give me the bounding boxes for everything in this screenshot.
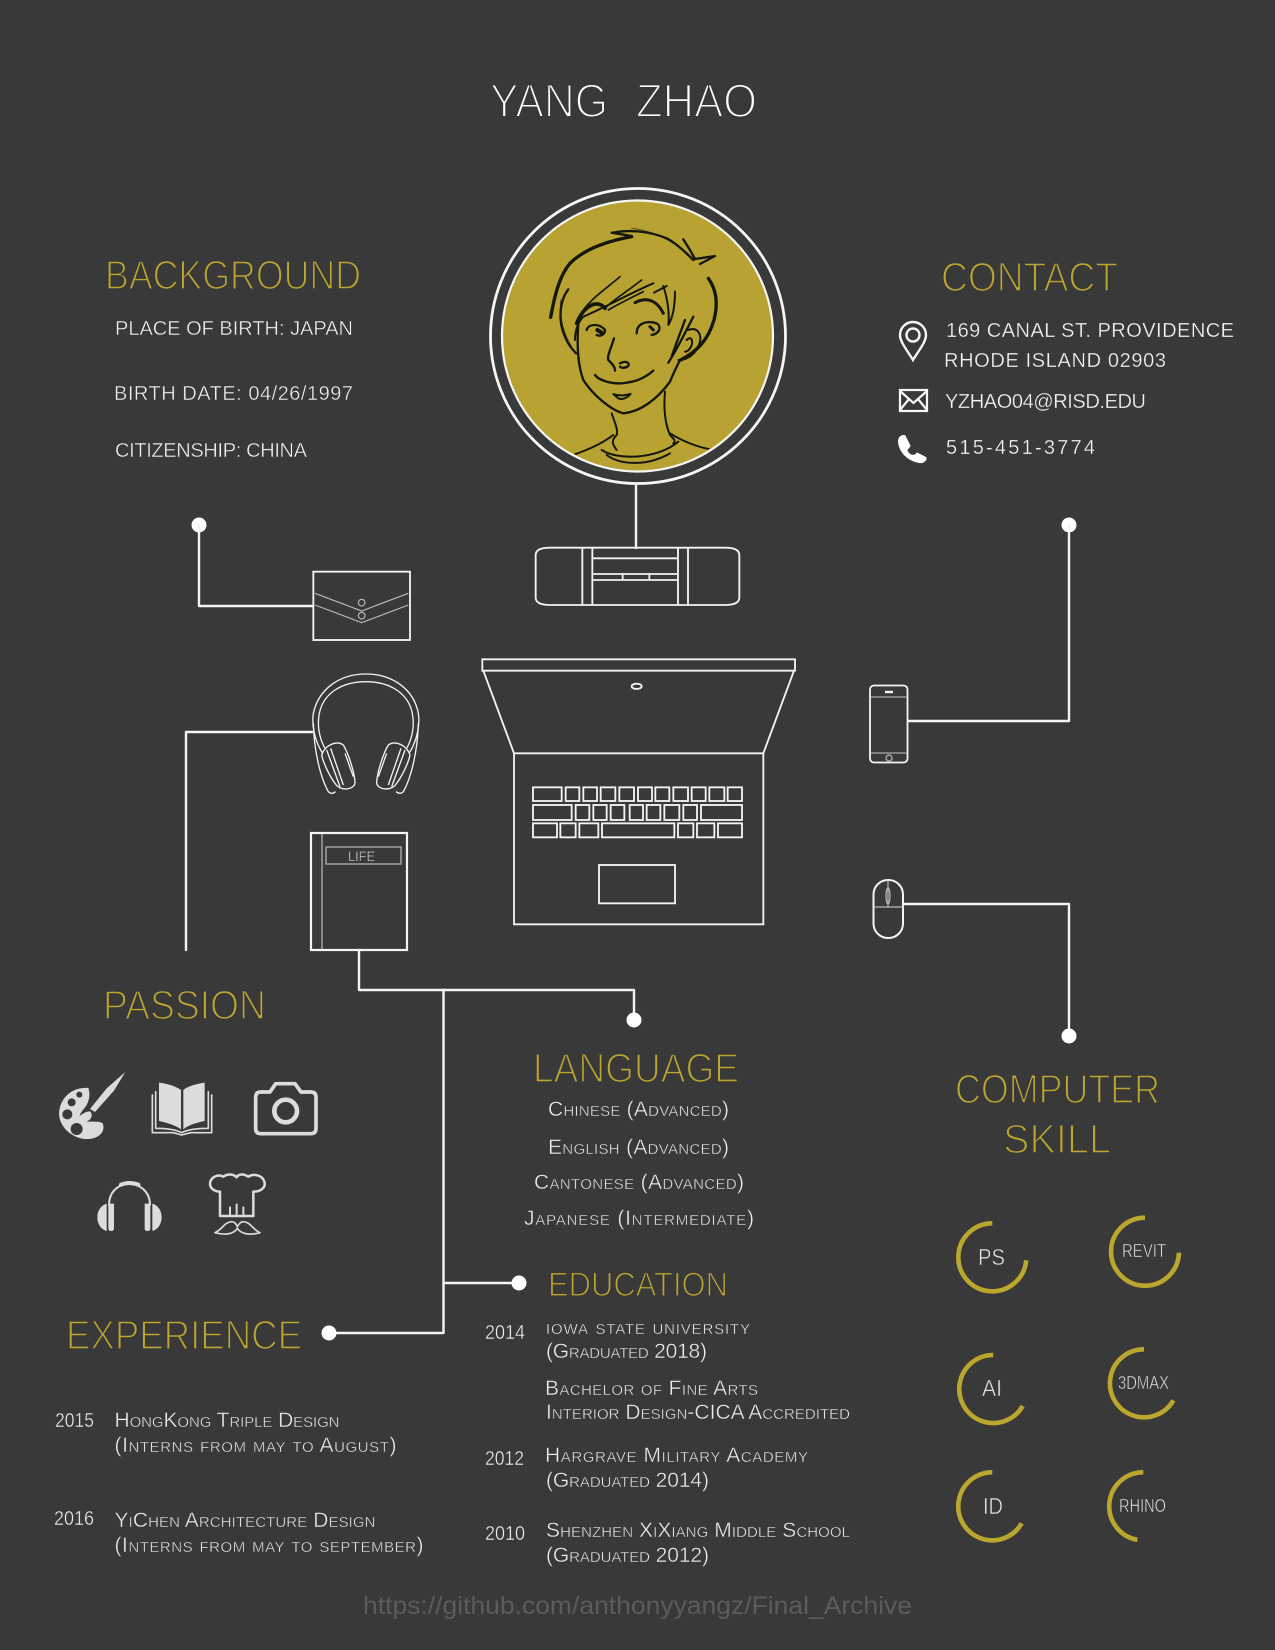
icon: mail xyxy=(900,390,927,411)
skill ring: 3DMax: 3DMAX xyxy=(1118,1373,1169,1393)
icon: mouse xyxy=(874,880,903,938)
skill ring: ID xyxy=(958,1472,1022,1540)
heading: language: LANGUAGE xyxy=(533,1045,739,1091)
heading: computer: COMPUTER xyxy=(955,1066,1160,1112)
skill ring: Revit: REVIT xyxy=(1122,1241,1166,1261)
icon: location pin xyxy=(900,322,926,360)
text: address line one: 169 CANAL ST. PROVIDENCE xyxy=(946,320,1234,342)
icon: phone handset xyxy=(898,435,927,463)
icon: headphones small xyxy=(97,1183,162,1231)
icon: laptop xyxy=(482,659,795,924)
text: graduated 2018: (Graduated 2018) xyxy=(546,1340,707,1363)
text: year 2015: 2015 xyxy=(55,1410,94,1432)
text: japanese: Japanese (Intermediate) xyxy=(524,1207,754,1230)
text: graduated 2014: (Graduated 2014) xyxy=(546,1469,709,1492)
skill ring: Rhino: RHINO xyxy=(1119,1496,1166,1516)
heading: background: BACKGROUND xyxy=(105,252,361,298)
text: place of birth: PLACE OF BIRTH: JAPAN xyxy=(115,318,353,340)
skill ring: AI: AI xyxy=(982,1375,1002,1401)
icon: open book xyxy=(152,1083,212,1135)
connector: contact to phone xyxy=(908,518,1076,721)
portrait xyxy=(490,188,786,484)
text: notebook label: LIFE xyxy=(348,848,375,864)
text: yichen: YiChen Architecture Design xyxy=(114,1509,376,1532)
footer url: https://github.com/anthonyyangz/Final_Archive xyxy=(363,1592,912,1620)
skill ring: PS xyxy=(958,1223,1026,1291)
icon: palette xyxy=(59,1072,125,1139)
skill ring: PS: PS xyxy=(978,1244,1005,1270)
icon: envelope bag xyxy=(313,572,410,640)
text: interns may to august: (Interns from may to August) xyxy=(114,1434,396,1457)
text: address line two: RHODE ISLAND 02903 xyxy=(944,350,1166,372)
text: birth date: BIRTH DATE: 04/26/1997 xyxy=(114,383,353,405)
text: year 2016: 2016 xyxy=(54,1508,94,1530)
text: year 2014: 2014 xyxy=(485,1322,525,1344)
icon: speaker xyxy=(536,548,739,605)
title: ZHAO xyxy=(636,74,757,127)
connector: headphones to passion xyxy=(186,732,312,950)
icon: chef hat and moustache xyxy=(210,1174,265,1234)
text: interior design: Interior Design-CICA Accredited xyxy=(546,1401,850,1424)
text: phone: 515-451-3774 xyxy=(946,437,1095,459)
title: YANG xyxy=(490,74,608,127)
icon: headphones xyxy=(313,674,419,793)
text: bachelor: Bachelor of Fine Arts xyxy=(545,1377,758,1400)
text: year 2012: 2012 xyxy=(485,1448,524,1470)
connector: background to envelope xyxy=(192,518,313,606)
connector: portrait to speaker xyxy=(635,485,637,548)
icon: notebook xyxy=(311,833,407,950)
title xyxy=(490,74,757,127)
text: graduated 2012: (Graduated 2012) xyxy=(546,1544,709,1567)
panel: contact xyxy=(898,254,1234,463)
connector: mouse to computer skill xyxy=(903,904,1076,1044)
connector: notebook to language, education and experience xyxy=(322,950,642,1340)
panel: background xyxy=(105,252,361,462)
skill ring: ID: ID xyxy=(983,1493,1003,1519)
heading: contact: CONTACT xyxy=(941,254,1118,300)
icon: camera xyxy=(256,1084,316,1134)
heading: experience: EXPERIENCE xyxy=(66,1312,302,1358)
skill ring: Revit xyxy=(1111,1218,1179,1286)
text: email: YZHAO04@RISD.EDU xyxy=(945,391,1146,413)
text: cantonese: Cantonese (Advanced) xyxy=(534,1171,744,1194)
panel: computer skill xyxy=(955,1066,1179,1540)
heading: skill: SKILL xyxy=(1003,1116,1111,1162)
skill ring: AI xyxy=(959,1355,1023,1423)
heading: passion: PASSION xyxy=(103,982,266,1028)
text: citizenship: CITIZENSHIP: CHINA xyxy=(115,440,308,462)
text: iowa state: iowa state university xyxy=(546,1316,750,1339)
panel: experience xyxy=(54,1312,424,1557)
panel: passion xyxy=(59,982,316,1234)
skill ring: Rhino xyxy=(1109,1472,1166,1540)
text: shenzhen: Shenzhen XiXiang Middle School xyxy=(546,1519,850,1542)
text: hargrave: Hargrave Military Academy xyxy=(545,1444,808,1467)
icon: smartphone xyxy=(870,686,908,762)
text: interns may to september: (Interns from may to september) xyxy=(114,1534,424,1557)
heading: education: EDUCATION xyxy=(548,1266,728,1304)
text: english: English (Advanced) xyxy=(548,1136,729,1159)
text: hongkong: HongKong Triple Design xyxy=(114,1409,340,1432)
text: year 2010: 2010 xyxy=(485,1523,525,1545)
text: chinese: Chinese (Advanced) xyxy=(548,1098,729,1121)
skill ring: 3DMax xyxy=(1110,1349,1173,1417)
panel: language xyxy=(524,1045,754,1230)
panel: education xyxy=(485,1266,850,1567)
